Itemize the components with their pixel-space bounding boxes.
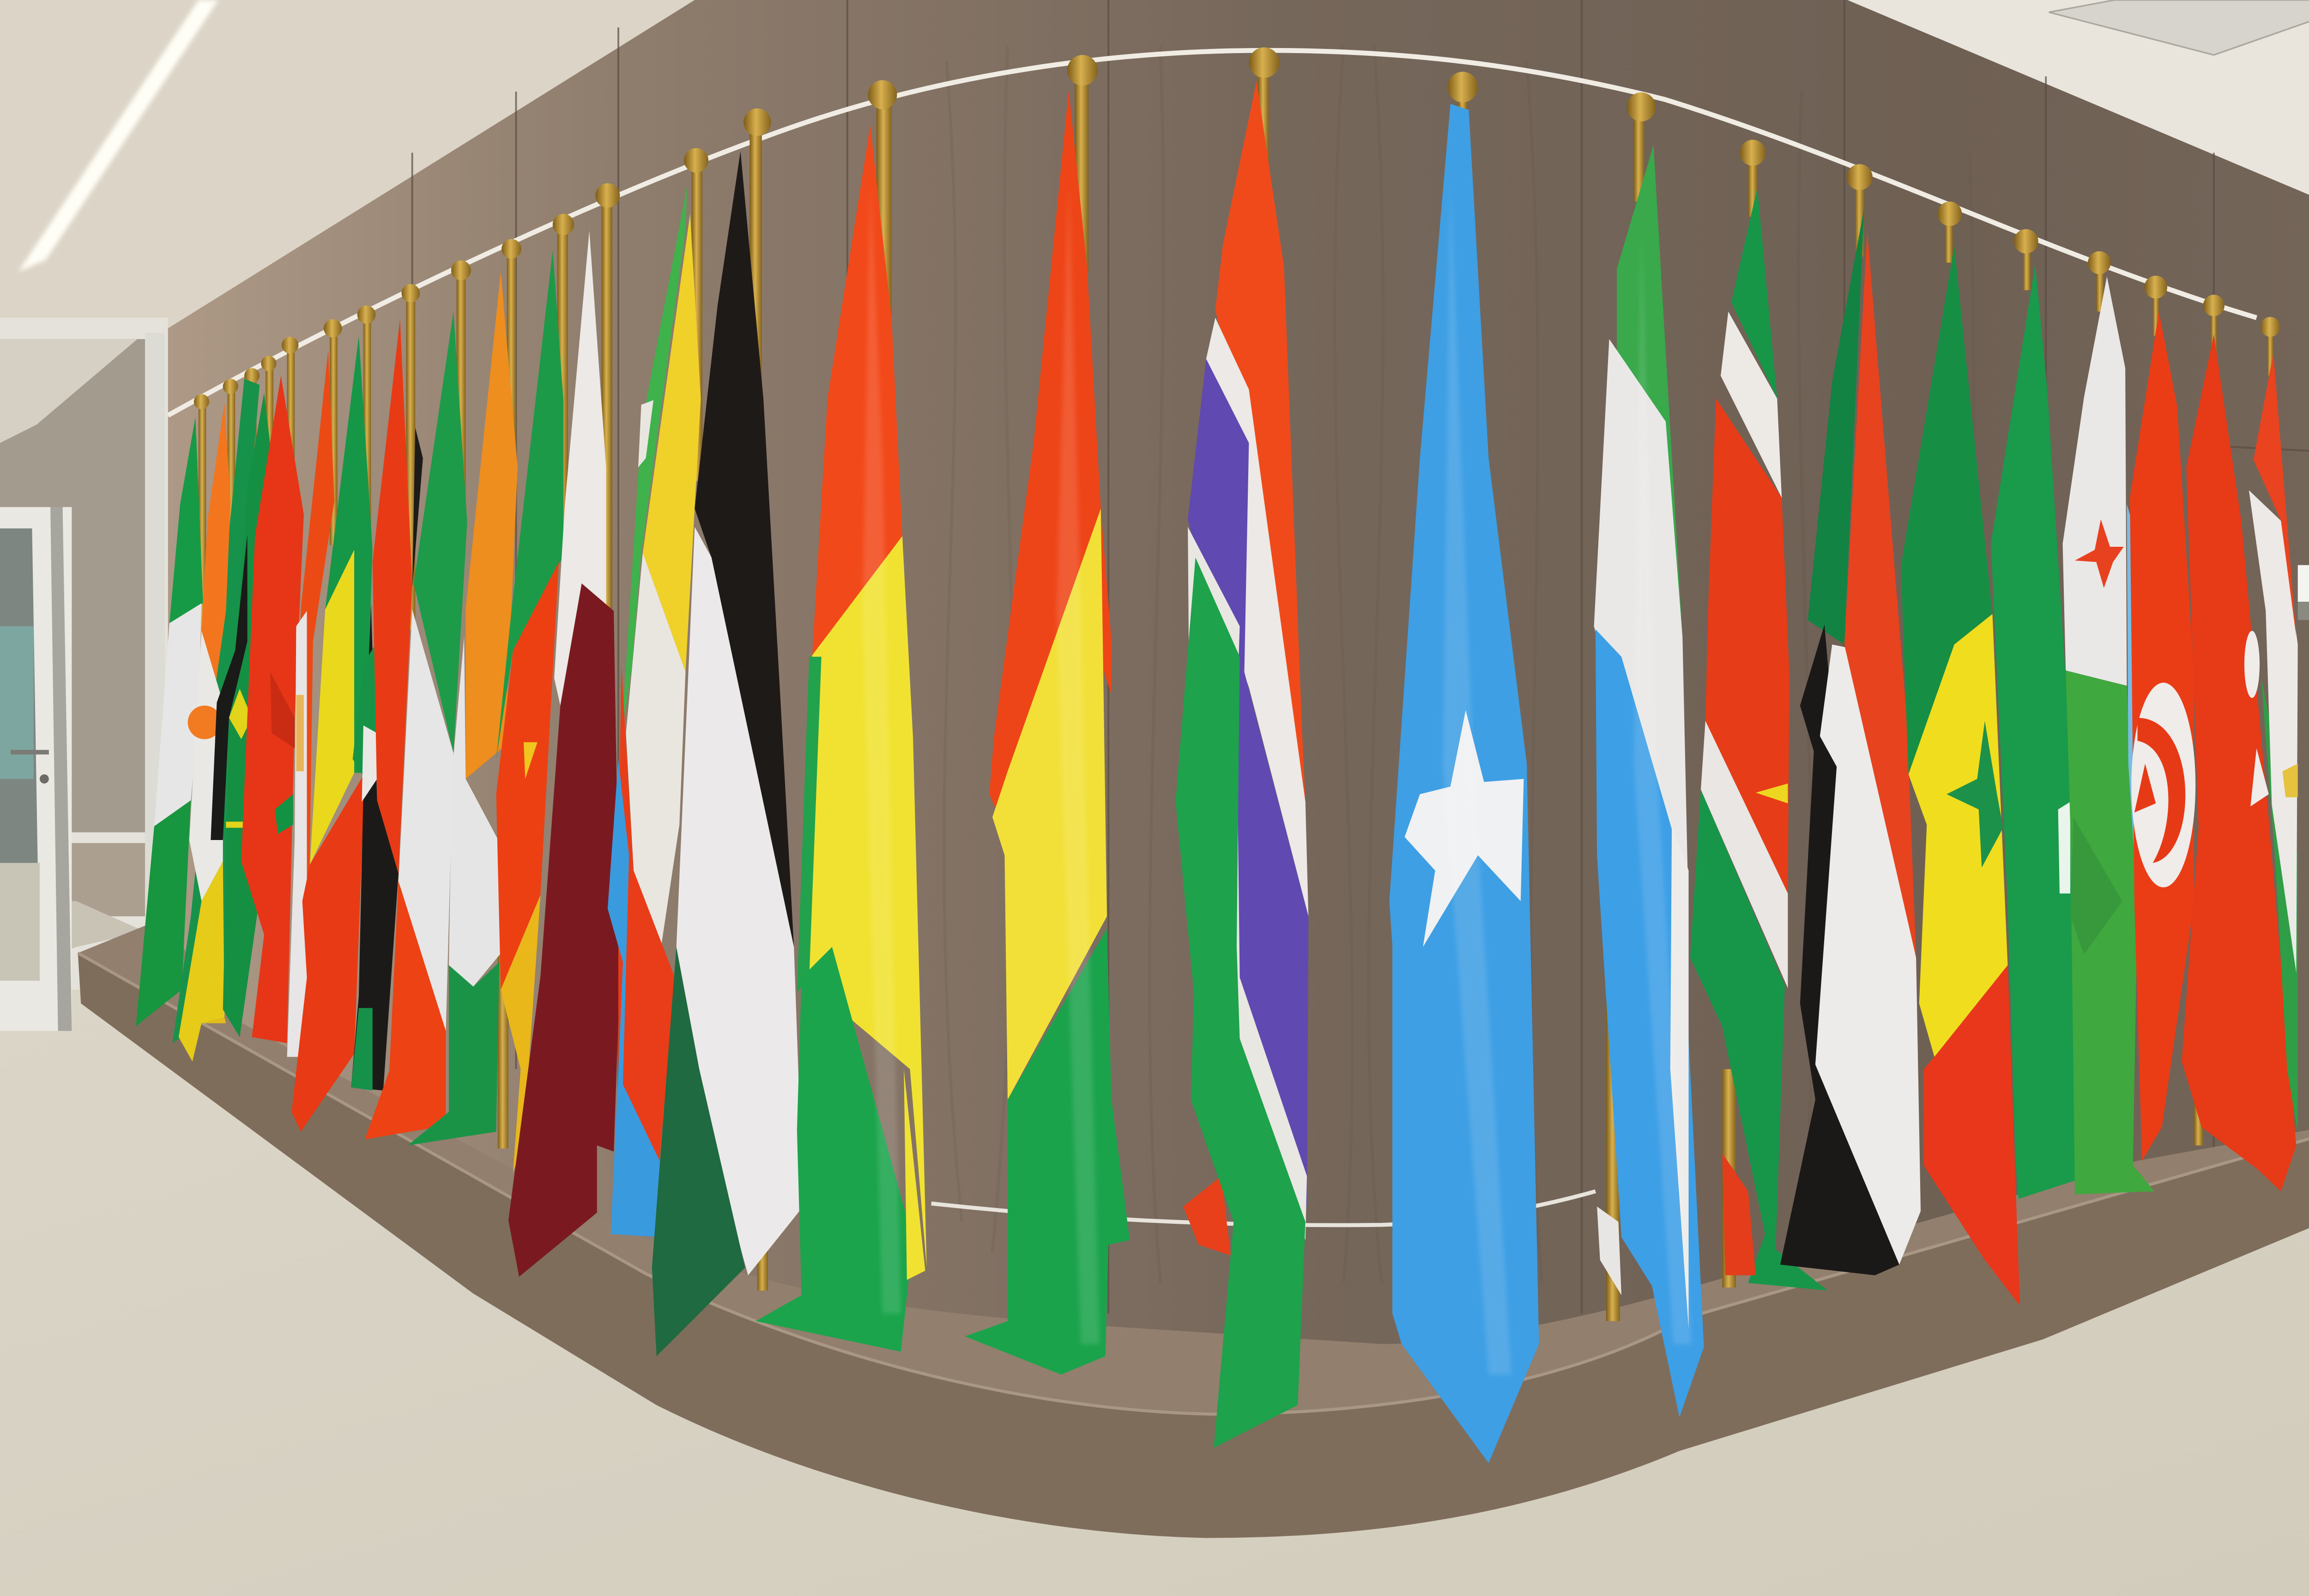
flag: Comoros green yellow white red blue [608,186,701,1237]
flag: orange white green [408,272,518,1145]
flag: Somalia blue with white star [1390,104,1539,1463]
platform: stepped curved base [78,916,2309,1538]
flag: Sudan green red white black [1780,208,1921,1275]
floor [0,855,2309,1596]
flag: green white red [365,312,467,1139]
flag poles with gold finials [194,48,2280,1321]
flag: green white green, far left [136,417,203,1026]
flag: Guinea-style red yellow green [965,90,1130,1374]
wall: wood panels [168,0,2309,1359]
flag: Libya red black green [351,319,423,1090]
flag: Suriname-style green white red star [1690,188,1827,1291]
flag: Mauritania green with gold star [211,393,272,1037]
flag: Sierra Leone green white blue [1594,145,1704,1417]
flag: Qatar white maroon [508,230,620,1277]
fabric sheen: soft highlights across flags [863,183,1692,1374]
flag: Senegal green yellow red star [1901,246,2020,1306]
flag: black white green tricolour [652,151,803,1356]
flag: Djibouti white green red star [2063,277,2154,1194]
flag: Morocco red [241,376,304,1043]
flag: Saudi Arabia green [1991,264,2075,1199]
flag: Cameroon green red yellow [496,250,563,1173]
flag: Niger orange white green [179,403,230,1061]
wall light fixture [2298,565,2309,620]
ceiling vent [2049,0,2309,55]
flag: red yellow green [756,125,927,1352]
flag: red white with emblem [287,350,334,1057]
flag: Gambia red white blue green [1176,81,1308,1448]
left glass room [0,318,168,990]
flag: Turkey red with crescent [2182,334,2296,1191]
flag: Tajikistan red white green [2249,353,2298,1133]
wall rail: white curved band [168,50,2256,416]
glass door [0,507,72,1031]
flag: green, behind [173,379,260,1043]
wall rail: lower band [931,1191,1596,1225]
flag: Tunisia red with white disc [2130,312,2195,1161]
flag: Mali-style green yellow red [291,336,373,1132]
ceiling [0,0,2309,328]
